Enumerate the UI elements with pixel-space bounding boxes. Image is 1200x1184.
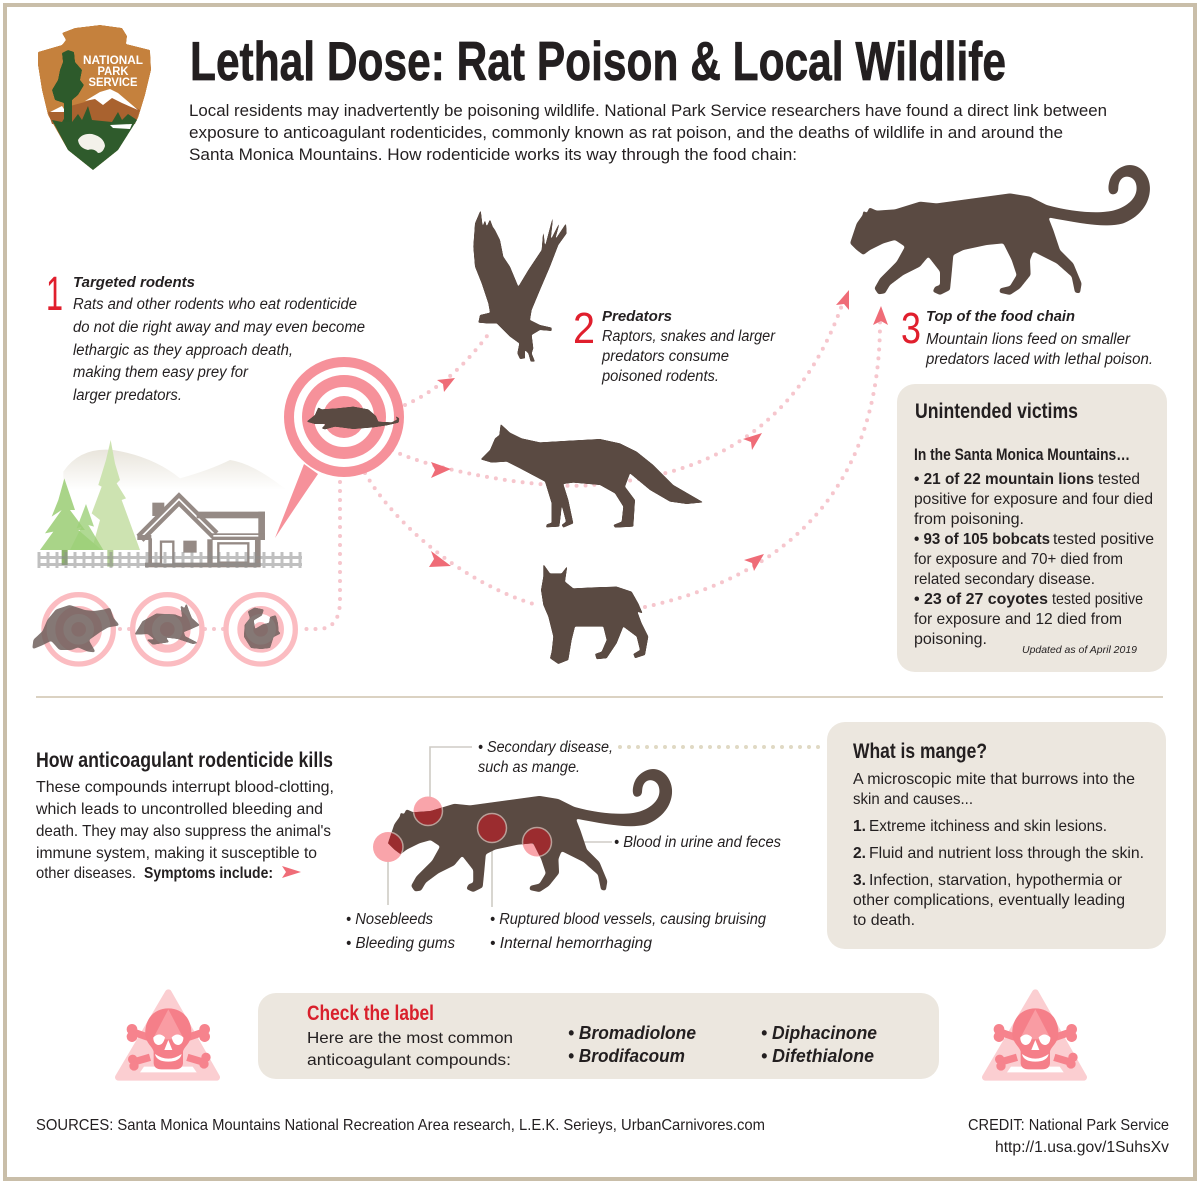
icon: National Park Service arrowhead logo: PARK — [98, 64, 129, 78]
text block: how anticoagulant rodenticide kills: other diseases. — [36, 865, 136, 882]
step 2 text: predators — [573, 304, 776, 385]
victims statistics: tested — [1098, 471, 1140, 488]
step 2 text: predators: Predators — [602, 308, 672, 325]
symptom labels: • Bleeding gums — [346, 935, 455, 952]
icon: raptor silhouette — [473, 210, 567, 362]
mange description — [853, 771, 1144, 929]
heading: unintended victims: Unintended victims — [915, 400, 1078, 423]
step 2 text: predators: 2 — [573, 304, 595, 353]
step 1 text: targeted rodents: Targeted rodents — [73, 274, 195, 291]
mange description: skin and causes... — [853, 791, 973, 808]
victims statistics: positive for exposure and four died — [914, 491, 1153, 508]
victims statistics: • 93 of 105 bobcats — [914, 531, 1050, 548]
icon: rat — [307, 407, 399, 429]
victims statistics: • 21 of 22 mountain lions — [914, 471, 1094, 488]
intro text: Local residents may inadvertently be poisoning wildlife. National Park Service researchers have found a direct link between — [189, 102, 1107, 120]
step 1 text: targeted rodents: larger predators. — [73, 387, 182, 404]
step 3 text: top of the food chain: 3 — [901, 304, 921, 353]
symptom labels: • Internal hemorrhaging — [490, 935, 652, 952]
mange description: 1. — [853, 818, 866, 835]
text block: how anticoagulant rodenticide kills: Symptoms include: — [144, 865, 273, 882]
target pin with rat — [275, 362, 399, 538]
heading: what is mange: What is mange? — [853, 740, 987, 763]
mange description: 3. — [853, 872, 866, 889]
panel: check the label — [258, 993, 939, 1079]
step 2 text: predators: Raptors, snakes and larger — [602, 328, 776, 345]
mange description: to death. — [853, 912, 915, 929]
dotted food-chain routes — [120, 305, 880, 629]
step 1 text: targeted rodents: 1 — [46, 268, 63, 321]
house — [137, 499, 265, 567]
symptom diagram: lion with affected areas — [373, 747, 672, 907]
mange description: other complications, eventually leading — [853, 892, 1125, 909]
victims statistics: for exposure and 70+ died from — [914, 551, 1123, 568]
step 3 text: top of the food chain: Top of the food chain — [926, 308, 1075, 325]
victims statistics: tested positive — [1053, 531, 1154, 548]
text block: how anticoagulant rodenticide kills: These compounds interrupt blood-clotting, — [36, 779, 334, 796]
step 1 text: targeted rodents — [46, 268, 365, 404]
text block: how anticoagulant rodenticide kills: immune system, making it susceptible to — [36, 845, 317, 862]
step 2 text: predators: poisoned rodents. — [601, 368, 719, 385]
step 3 text: top of the food chain: Mountain lions feed on smaller — [926, 331, 1131, 348]
target: raccoon — [33, 595, 119, 664]
icon: National Park Service arrowhead logo — [38, 25, 151, 170]
compound list: • Bromadiolone — [568, 1023, 696, 1043]
label intro: anticoagulant compounds: — [307, 1052, 511, 1069]
intro text: exposure to anticoagulant rodenticides, commonly known as rat poison, and the deaths of wildlife in and around the — [189, 124, 1063, 142]
icon: National Park Service arrowhead logo: NATIONAL — [83, 53, 143, 67]
victims statistics: poisoning. — [914, 631, 987, 648]
icon: skull warning right — [985, 993, 1084, 1077]
heading: check the label: Check the label — [307, 1002, 434, 1025]
symptom labels: such as mange. — [478, 759, 580, 776]
victims statistics: In the Santa Monica Mountains… — [914, 446, 1130, 464]
step 2 text: predators: predators consume — [601, 348, 729, 365]
step 1 text: targeted rodents: making them easy prey for — [73, 364, 249, 381]
compound list: • Difethialone — [761, 1046, 874, 1066]
mange description: Extreme itchiness and skin lesions. — [869, 818, 1107, 835]
credit — [968, 1117, 1169, 1156]
text block: how anticoagulant rodenticide kills: How anticoagulant rodenticide kills — [36, 749, 333, 772]
panel: what is mange — [827, 722, 1166, 949]
symptom labels: • Blood in urine and feces — [614, 834, 781, 851]
compound list — [568, 1023, 877, 1066]
victims statistics: related secondary disease. — [914, 571, 1095, 588]
arrow to symptoms — [282, 866, 301, 878]
text block: how anticoagulant rodenticide kills — [35, 749, 334, 882]
dotted link to mange panel — [620, 745, 822, 749]
illustration: neighbourhood with trees and house — [40, 440, 287, 567]
symptom labels: • Ruptured blood vessels, causing bruising — [490, 911, 766, 928]
step 1 text: targeted rodents: do not die right away and may even become — [73, 319, 365, 336]
compound list: • Diphacinone — [761, 1023, 877, 1043]
label intro — [307, 1030, 513, 1069]
victims statistics: for exposure and 12 died from — [914, 611, 1122, 628]
icon: fox silhouette — [481, 424, 703, 528]
label intro: Here are the most common — [307, 1030, 513, 1047]
mange description: Infection, starvation, hypothermia or — [869, 872, 1123, 889]
sources: SOURCES: Santa Monica Mountains National Recreation Area research, L.E.K. Serieys, UrbanCarnivores.com — [36, 1117, 765, 1134]
credit: http://1.usa.gov/1SuhsXv — [995, 1139, 1169, 1156]
icon: bobcat silhouette — [541, 564, 648, 664]
step 3 text: top of the food chain — [901, 304, 1153, 368]
update note: Updated as of April 2019 — [1022, 644, 1137, 656]
mange description: 2. — [853, 845, 866, 862]
victims statistics: from poisoning. — [914, 511, 1024, 528]
symptom labels: • Nosebleeds — [346, 911, 433, 928]
fence — [39, 552, 302, 568]
text block: how anticoagulant rodenticide kills: death. They may also suppress the animal's — [36, 823, 331, 840]
compound list: • Brodifacoum — [568, 1046, 685, 1066]
step 1 text: targeted rodents: lethargic as they approach death, — [73, 342, 293, 359]
icon: mountain lion silhouette — [850, 165, 1150, 295]
victims statistics — [914, 446, 1154, 648]
mange description: A microscopic mite that burrows into the — [853, 771, 1135, 788]
step 3 text: top of the food chain: predators laced with lethal poison. — [925, 351, 1153, 368]
symptom labels: • Secondary disease, — [478, 739, 613, 756]
icon: skull warning left — [118, 993, 217, 1077]
step 1 text: targeted rodents: Rats and other rodents who eat rodenticide — [73, 296, 357, 313]
panel: unintended victims — [897, 384, 1167, 672]
text block: how anticoagulant rodenticide kills: which leads to uncontrolled bleeding and — [35, 801, 323, 818]
mange description: Fluid and nutrient loss through the skin. — [869, 845, 1144, 862]
victims statistics: • 23 of 27 coyotes — [914, 591, 1048, 608]
intro text: Santa Monica Mountains. How rodenticide works its way through the food chain: — [189, 146, 797, 164]
target: rabbit — [133, 595, 202, 664]
credit: CREDIT: National Park Service — [968, 1117, 1169, 1134]
intro text — [189, 102, 1107, 164]
icon: National Park Service arrowhead logo: SERVICE — [88, 75, 138, 89]
symptom labels — [346, 739, 781, 952]
victims statistics: tested positive — [1052, 591, 1143, 608]
arrowheads on the routes — [429, 290, 888, 571]
target: squirrel — [226, 595, 295, 664]
